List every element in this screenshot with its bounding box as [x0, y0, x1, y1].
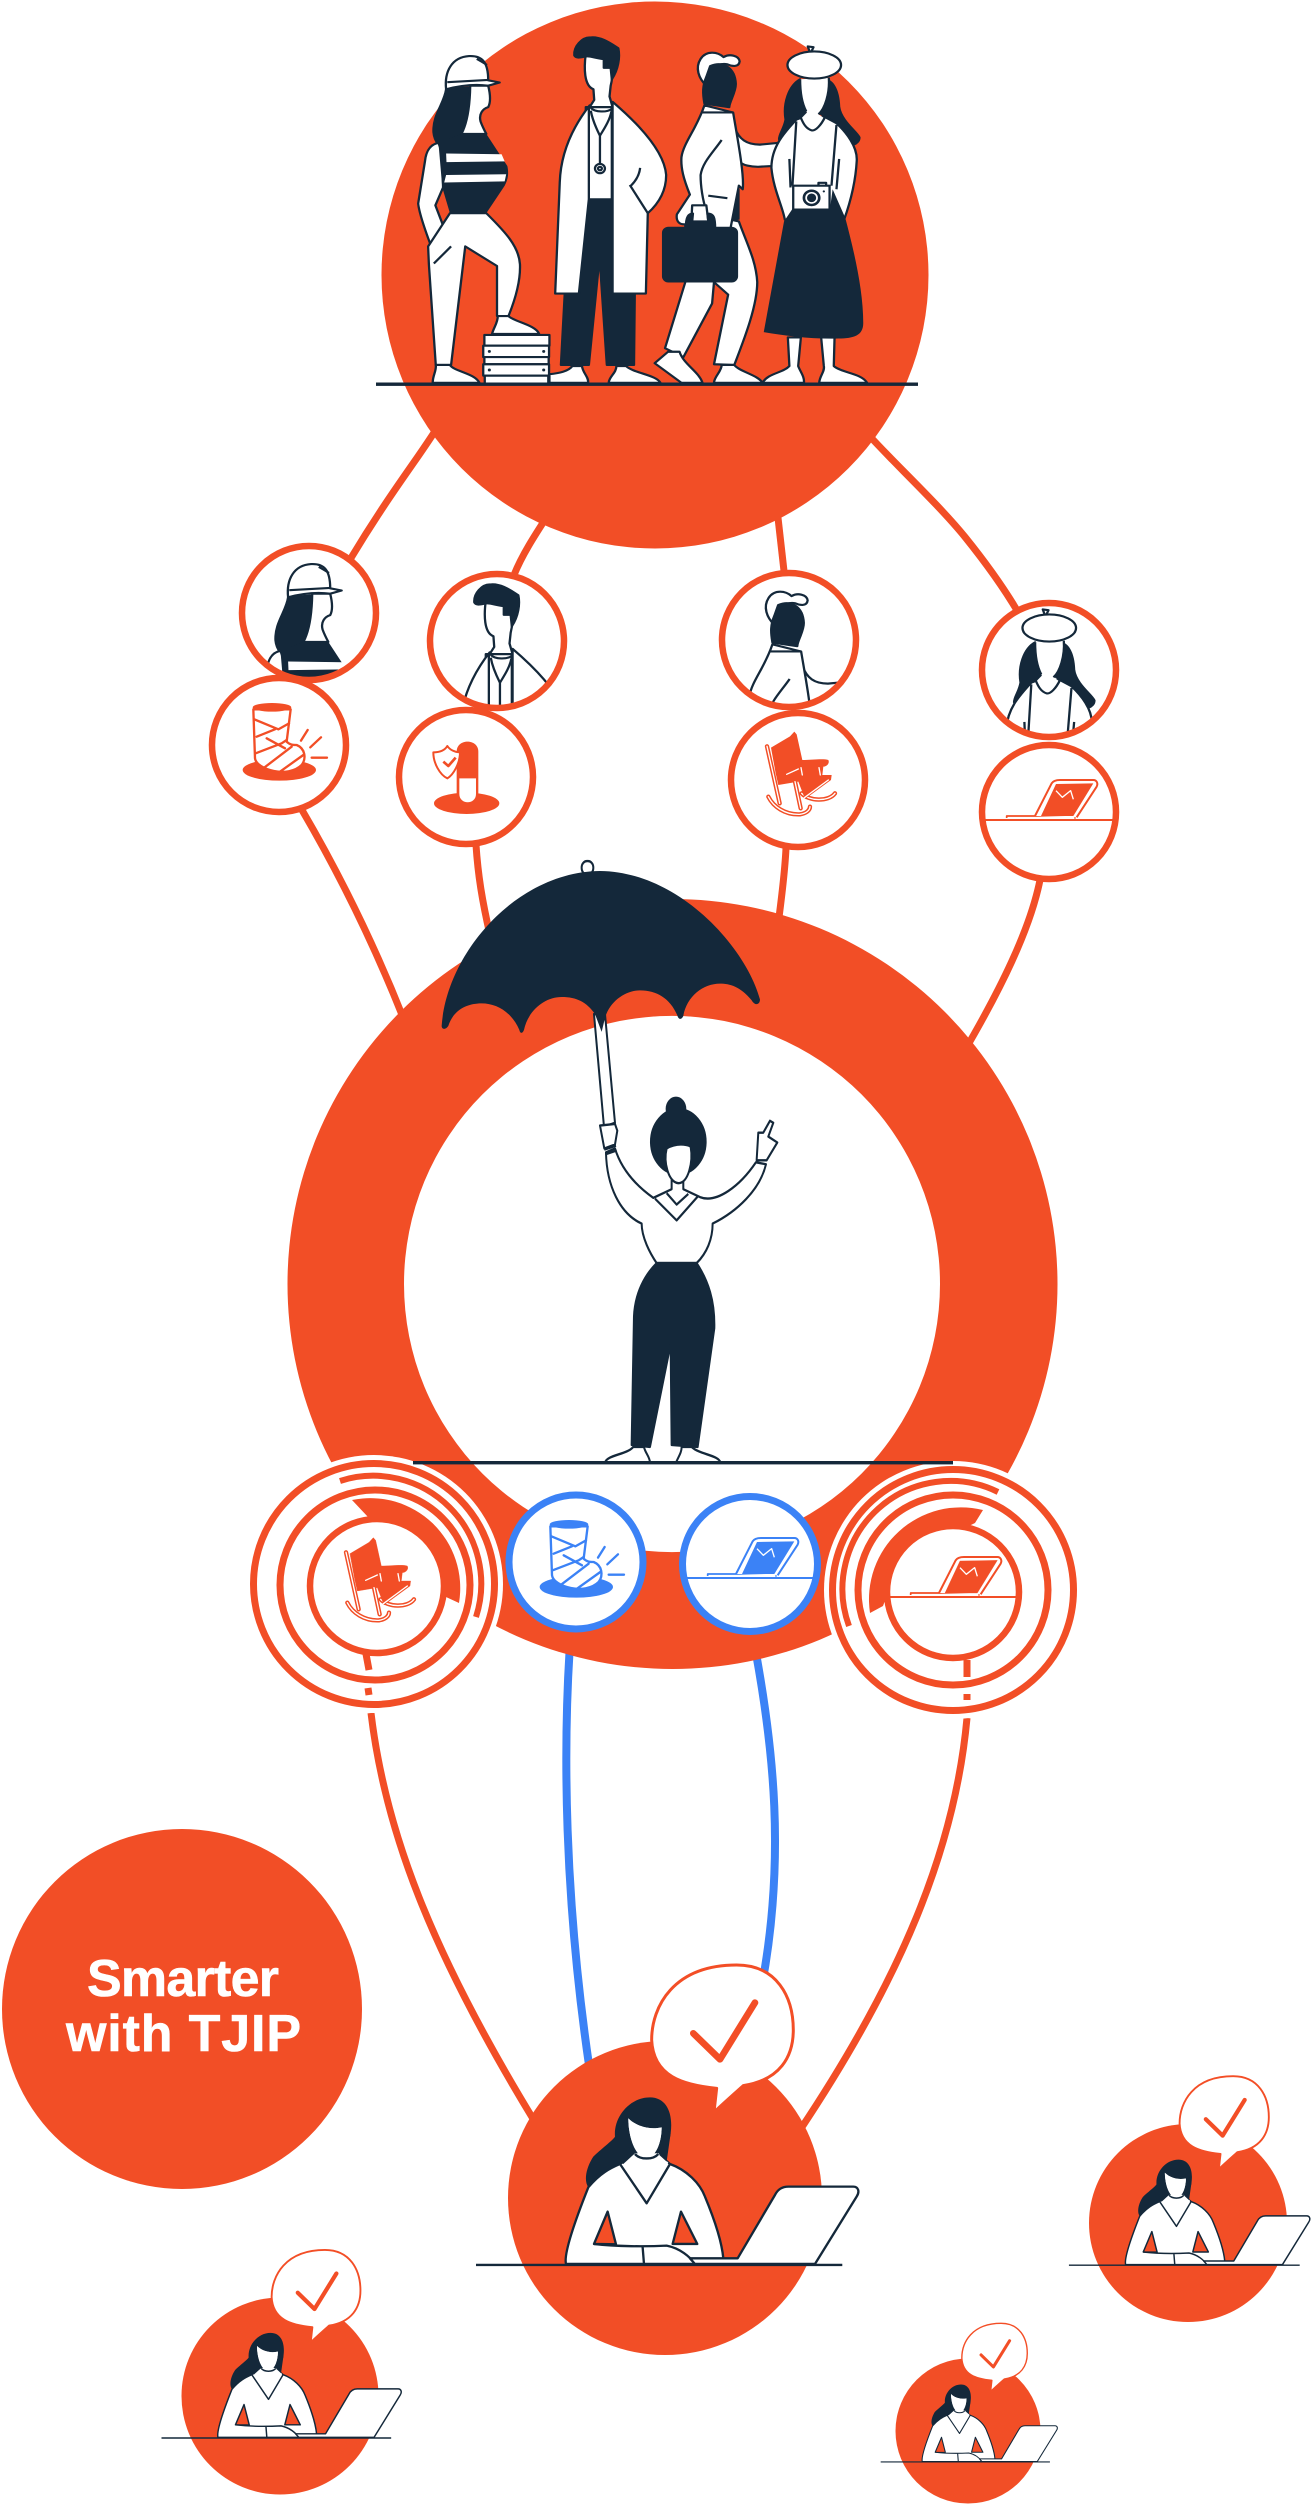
panel: central ring [288, 899, 1058, 1669]
hair [651, 1098, 706, 1174]
connector: chair rings to main desk person [371, 1713, 535, 2122]
face [666, 1144, 691, 1183]
umbrella canopy [442, 871, 760, 1033]
icon circle: laptop [982, 745, 1116, 879]
torso and arms [606, 1148, 766, 1263]
icon circle: rocking chair [731, 713, 865, 847]
stem [366, 1654, 369, 1695]
figure: woman holding umbrella [442, 861, 777, 1463]
connector: blue laptop to main desk person [752, 1632, 775, 1985]
thick arc [352, 1498, 460, 1603]
connector: top circle to photographer avatar [860, 425, 1018, 612]
figure: man with briefcase [655, 53, 779, 383]
icon circle: leg cast [212, 678, 346, 812]
panel: Smarter with TJIP [2, 1829, 362, 2189]
shoes [605, 1447, 650, 1463]
connector: laptop icon to ring [965, 880, 1040, 1050]
outer ring [832, 1470, 1074, 1710]
left hand [600, 1124, 617, 1148]
middle ring [280, 1490, 470, 1680]
connector: laptop rings to main desk person [800, 1718, 967, 2130]
avatar: hard-hat woman [238, 542, 380, 684]
connector: top circle to hard-hat avatar [351, 415, 445, 558]
ground line [376, 382, 918, 386]
umbrella handle [594, 1014, 615, 1127]
chair [346, 1538, 414, 1620]
panel: main desk person with check bubble [476, 1965, 858, 2355]
figure: woman with hard hat on books [418, 56, 549, 384]
thin arc [340, 1476, 481, 1617]
icon circle: blue laptop [682, 1496, 818, 1632]
thin arc [842, 1481, 998, 1626]
figure: woman with camera [763, 46, 867, 383]
title: Smarter [87, 1950, 279, 2008]
panel: top group of four professionals [376, 2, 928, 548]
panel: small desk person [881, 2323, 1057, 2504]
title: with TJIP [65, 2005, 301, 2063]
thick arc [869, 1507, 983, 1613]
stem [964, 1660, 970, 1700]
inner circle [310, 1519, 444, 1653]
connector: blue cast to main desk person [566, 1630, 589, 2065]
icon: laptop with concentric rings [832, 1470, 1074, 1710]
left cuff [604, 1146, 617, 1154]
figure: doctor [549, 37, 666, 383]
inner circle [887, 1526, 1019, 1658]
connector: top circle to doctor avatar [514, 515, 548, 575]
right hand [757, 1121, 777, 1160]
icon circle: blue leg cast [509, 1495, 643, 1629]
avatar: photographer [978, 600, 1120, 740]
avatar: businessman [718, 570, 860, 710]
collar [655, 1193, 698, 1220]
connector: cast icon to ring [302, 810, 408, 1030]
avatar: doctor [426, 570, 568, 712]
icon circle: pill and shield [399, 710, 533, 844]
trousers [632, 1263, 714, 1447]
white halos behind ring icons [245, 1455, 1082, 1719]
outer ring [254, 1464, 494, 1704]
connector: top circle to businessman avatar [776, 500, 784, 571]
umbrella knob [582, 861, 593, 875]
icon: rocking chair with concentric rings [254, 1464, 494, 1704]
connector: chair icon to ring [778, 848, 786, 925]
middle ring [858, 1495, 1048, 1685]
connector: pill icon to ring [476, 845, 490, 935]
panel: right desk person [1069, 2076, 1310, 2322]
panel: left desk person [161, 2250, 401, 2494]
ground line under umbrella woman [413, 1461, 953, 1464]
laptop [889, 1557, 1017, 1597]
top orange circle [382, 2, 928, 548]
